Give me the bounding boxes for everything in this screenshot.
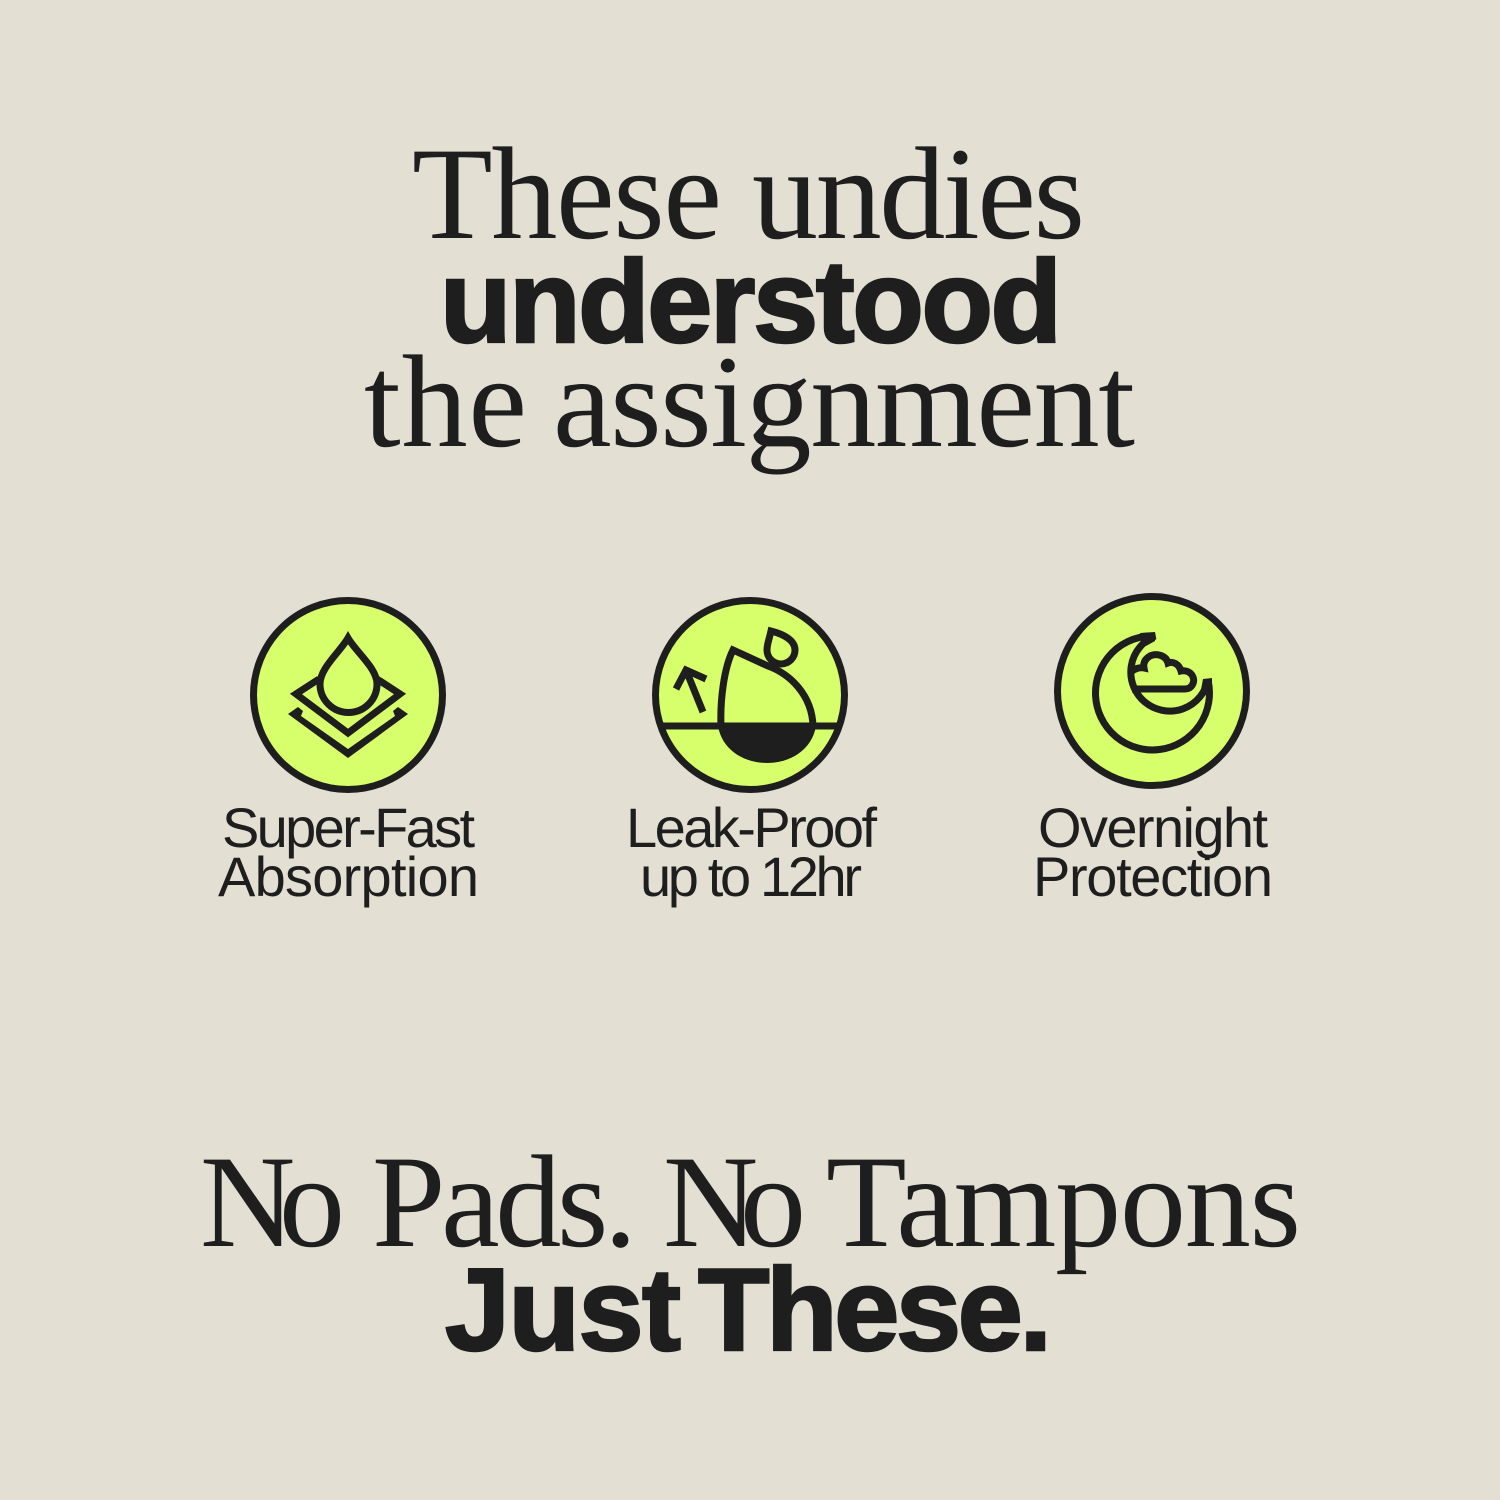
closing statement (200, 1128, 1301, 1375)
label: overnight protection: Protection (1033, 845, 1273, 908)
title: understood (440, 236, 1062, 367)
title (364, 120, 1135, 475)
icon: moon and cloud (1058, 596, 1246, 786)
closing statement: Pads. (372, 1128, 637, 1275)
closing statement: No (663, 1128, 806, 1275)
title: assignment (553, 328, 1135, 475)
icon: leak-proof (656, 600, 844, 790)
label: leak-proof up to 12hr (626, 796, 877, 908)
label: overnight protection (1033, 796, 1273, 908)
closing statement: No (200, 1128, 345, 1275)
title: the (364, 328, 527, 475)
title: These (412, 120, 722, 267)
closing statement: These. (698, 1244, 1052, 1375)
label: overnight protection: Overnight (1038, 796, 1268, 859)
label: super-fast absorption: Super-Fast (222, 796, 475, 859)
closing statement: Tampons (826, 1128, 1301, 1275)
label: leak-proof up to 12hr: up to 12hr (640, 845, 862, 908)
label: super-fast absorption: Absorption (218, 845, 479, 908)
title: undies (752, 120, 1085, 267)
icon: drop on layers (254, 600, 442, 790)
label: super-fast absorption (218, 796, 479, 908)
closing statement: Just (445, 1244, 681, 1375)
label: leak-proof up to 12hr: Leak-Proof (626, 796, 877, 859)
